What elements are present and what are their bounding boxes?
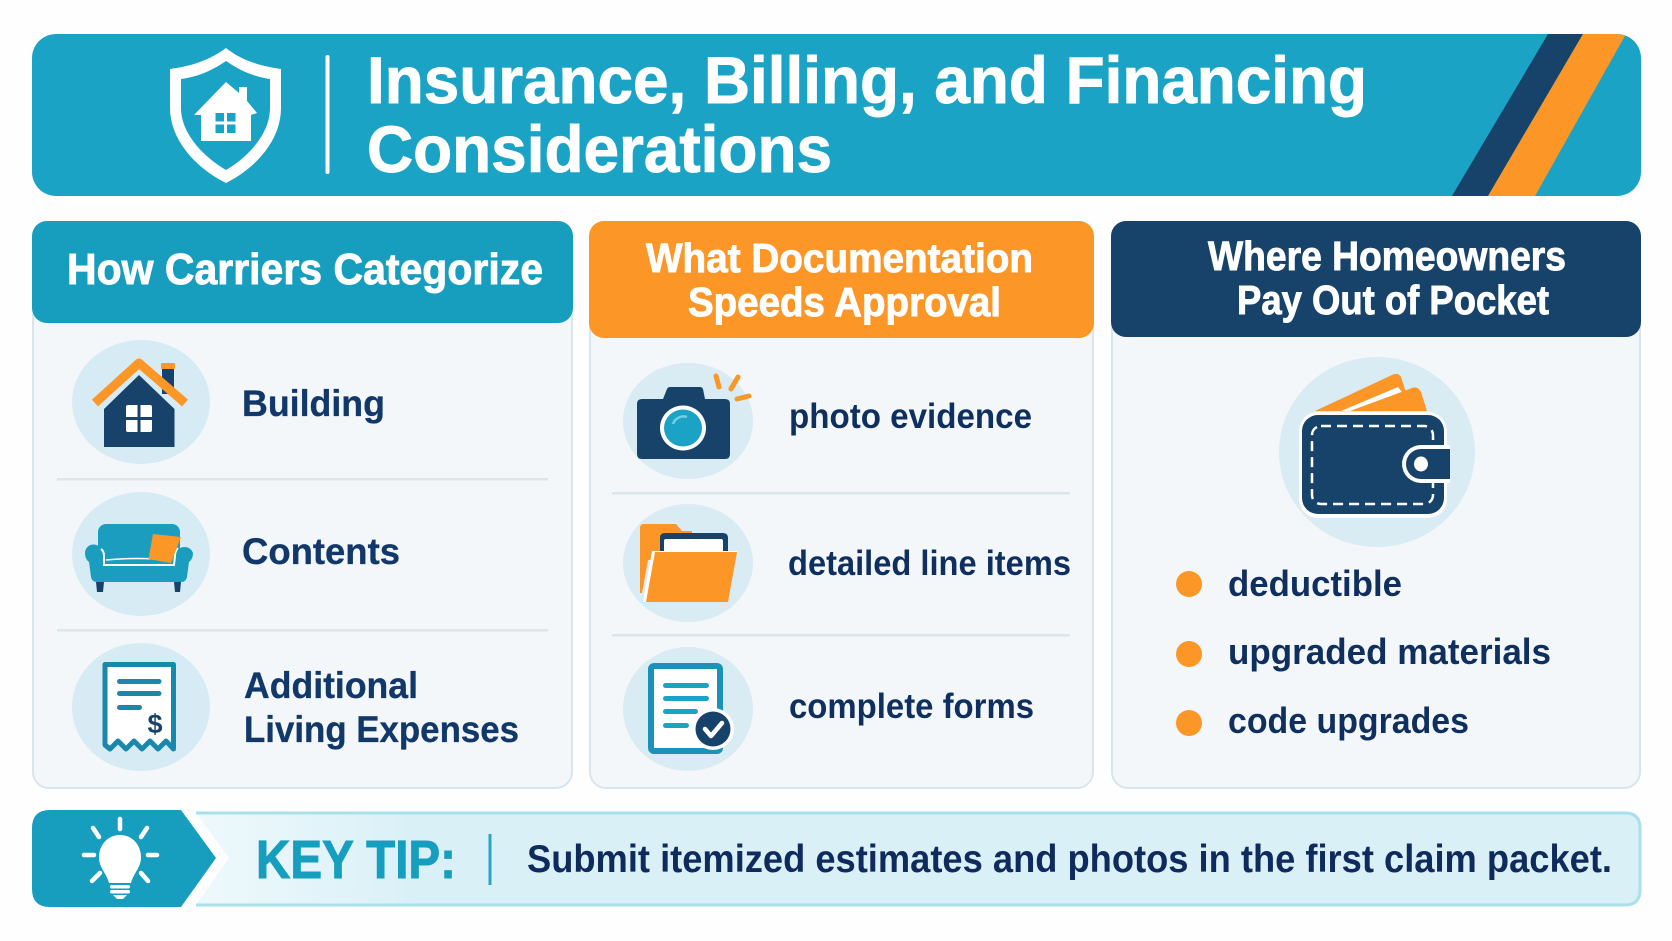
column heading: Speeds Approval [688, 279, 1001, 325]
item: complete forms: complete forms [789, 687, 1034, 726]
panel: where homeowners pay out of pocket [1111, 221, 1641, 788]
icon: sofa [85, 524, 193, 592]
header banner [32, 34, 1641, 196]
column heading: Pay Out of Pocket [1237, 277, 1549, 323]
icon: document with check [651, 666, 734, 751]
callout: key tip [32, 810, 1640, 907]
tip banner [196, 813, 1640, 905]
panel: what documentation speeds approval [589, 221, 1094, 788]
icon: wallet [1279, 357, 1475, 547]
item: additional living expenses [72, 643, 519, 771]
bullet: upgraded materials: upgraded materials [1228, 631, 1551, 672]
bullet: deductible: deductible [1228, 563, 1402, 604]
icon: receipt: $ [147, 709, 163, 739]
item: building [72, 340, 385, 464]
column heading: How Carriers Categorize [67, 245, 543, 294]
tip text: Submit itemized estimates and photos in the first claim packet. [527, 838, 1612, 881]
title: Considerations [367, 112, 832, 186]
label [244, 665, 519, 750]
panel: how carriers categorize [32, 221, 573, 788]
title [367, 43, 1367, 186]
panel body [590, 310, 1093, 788]
title: Insurance, Billing, and Financing [367, 43, 1367, 117]
item: contents [72, 492, 400, 616]
item: building: Building [242, 383, 385, 424]
item: photo evidence: photo evidence [789, 397, 1032, 436]
decorative diagonal stripes [1452, 34, 1626, 196]
item: photo evidence [623, 363, 1032, 479]
icon: camera [637, 376, 749, 459]
header divider [326, 55, 330, 174]
item: detailed line items [623, 504, 1071, 622]
label: Additional [244, 665, 418, 706]
bullet: code upgrades: code upgrades [1228, 700, 1469, 741]
item: complete forms [623, 647, 1034, 771]
item: detailed line items: detailed line items [788, 544, 1071, 583]
panel body [1112, 310, 1640, 788]
column heading [589, 221, 1094, 338]
column heading [1111, 221, 1641, 337]
column heading: What Documentation [646, 235, 1033, 281]
icon: receipt [105, 664, 174, 749]
icon: light bulb [84, 819, 157, 899]
column heading [32, 221, 573, 323]
icon: folder [640, 524, 737, 602]
panel body [33, 300, 572, 788]
icon: house [95, 363, 185, 447]
icon: shield with house [170, 48, 281, 183]
item: contents: Contents [242, 531, 400, 572]
tip arrow tab [32, 810, 216, 907]
label: Living Expenses [244, 709, 519, 750]
key tip label: KEY TIP: [256, 830, 456, 890]
column heading: Where Homeowners [1208, 233, 1566, 279]
